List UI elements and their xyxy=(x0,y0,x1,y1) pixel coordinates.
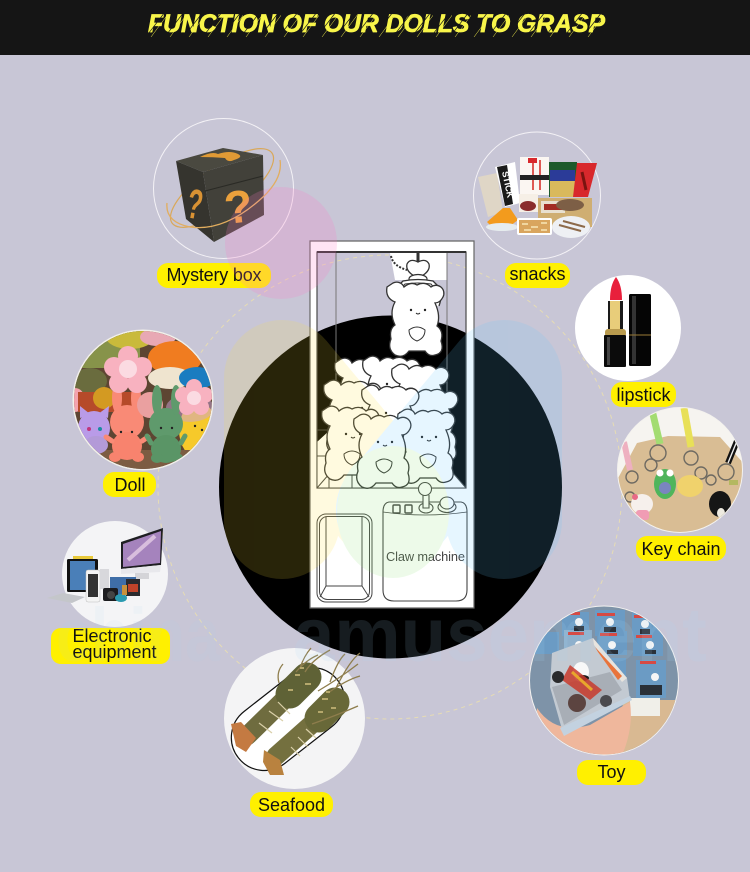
label: toy: Toy xyxy=(597,762,626,782)
logo yellow stroke xyxy=(282,378,392,521)
claw machine label: Claw machine xyxy=(386,549,465,564)
item: doll xyxy=(72,330,214,470)
title: FUNCTION OF OUR DOLLS TO GRASP xyxy=(148,10,605,38)
claw machine illustration xyxy=(310,241,474,608)
label: snacks xyxy=(505,263,570,288)
item: toy xyxy=(525,604,685,760)
item: snacks xyxy=(474,132,600,259)
label: doll xyxy=(103,472,156,497)
label: lipstick: lipstick xyxy=(616,385,672,405)
label: toy xyxy=(577,760,646,785)
label: electronic equipment xyxy=(51,626,170,664)
item: mystery box: ? xyxy=(183,181,206,229)
item: seafood xyxy=(218,648,365,789)
logo blue stroke xyxy=(394,378,504,521)
item: mystery box: ? xyxy=(222,179,255,234)
prize door xyxy=(317,514,372,602)
label: mystery box xyxy=(157,263,271,288)
control panel xyxy=(383,482,467,601)
logo overlay: pink circle xyxy=(225,187,337,299)
label: electronic equipment: Electronic xyxy=(72,626,152,646)
label: electronic equipment: equipment xyxy=(72,642,157,662)
label: doll: Doll xyxy=(114,475,146,495)
label: seafood: Seafood xyxy=(258,795,325,815)
dashed orbit ring xyxy=(158,255,622,719)
item: snacks: STICK xyxy=(500,170,516,199)
logo overlay: M mark in yellow, blue and green xyxy=(282,378,504,578)
label: mystery box: Mystery box xyxy=(166,265,262,285)
label: seafood xyxy=(250,792,333,817)
watermark xyxy=(56,593,707,678)
item: lipstick xyxy=(575,275,681,381)
item: electronic equipment xyxy=(47,521,168,627)
logo green circle xyxy=(337,446,449,578)
label: key chain: Key chain xyxy=(641,539,721,559)
central black circle xyxy=(219,316,562,658)
label: lipstick xyxy=(611,382,676,407)
plush pile xyxy=(322,356,458,488)
claw xyxy=(391,253,441,306)
hanging plush xyxy=(387,282,444,356)
watermark: amusement xyxy=(293,593,707,678)
header bar xyxy=(0,0,750,55)
watermark: china xyxy=(56,593,221,678)
item: mystery box xyxy=(154,118,294,258)
item: key chain xyxy=(616,407,745,535)
label: snacks: snacks xyxy=(509,264,566,284)
